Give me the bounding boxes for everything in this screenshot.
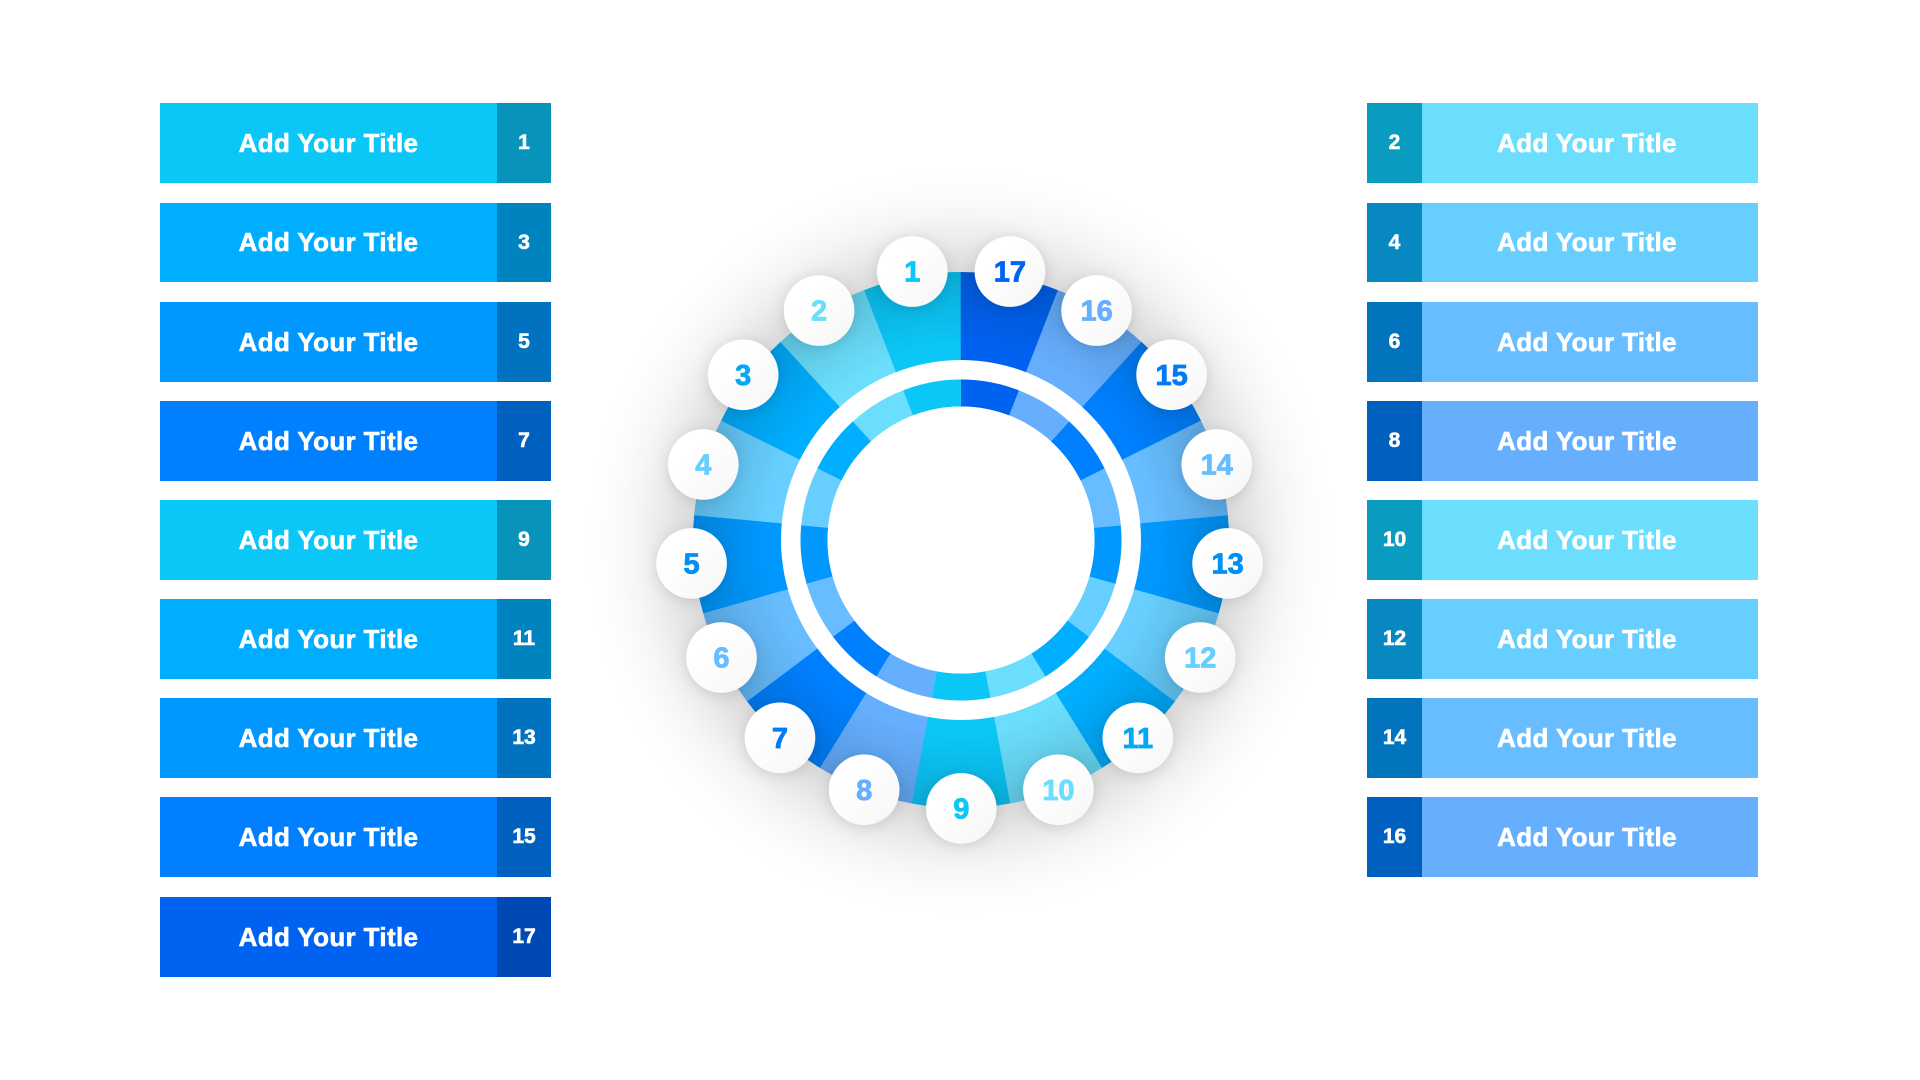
right bar 12: 12	[1383, 627, 1406, 650]
left bar 5: Add Your Title	[239, 326, 418, 356]
center circle	[828, 406, 1094, 674]
bubble 3: 3	[735, 360, 751, 392]
bubble 11	[1102, 702, 1173, 773]
left bar 13	[160, 698, 551, 778]
right bar 6	[1367, 302, 1758, 382]
bubble 11: 11	[1122, 723, 1153, 755]
bubble 16	[1061, 275, 1132, 346]
left bar 3	[160, 203, 551, 282]
bubble 10	[1023, 754, 1094, 825]
left bar 11: 11	[513, 627, 535, 650]
left bar 7: 7	[518, 429, 530, 452]
left bar 5	[160, 302, 551, 382]
bubble 17: 17	[994, 256, 1026, 288]
left bar 3: 3	[518, 230, 530, 254]
left bar 17: 17	[512, 925, 536, 948]
bubble 2: 2	[811, 296, 827, 328]
left bar 9	[160, 500, 551, 580]
right bar 16: 16	[1383, 825, 1406, 848]
right bar 4	[1367, 203, 1758, 282]
left bar 15: Add Your Title	[239, 822, 418, 852]
left bar 15	[160, 797, 551, 877]
left bar 17	[160, 897, 551, 977]
bubble 12: 12	[1184, 642, 1216, 674]
right bar 16: Add Your Title	[1497, 822, 1677, 852]
bubble 6	[686, 622, 757, 693]
left bar 11	[160, 599, 551, 679]
right bar 6: Add Your Title	[1497, 326, 1677, 356]
right bar 12: Add Your Title	[1497, 624, 1677, 654]
left bar 1	[160, 103, 551, 183]
right bar 16	[1367, 797, 1758, 877]
right bar 14: 14	[1383, 726, 1406, 749]
left bar 9: 9	[518, 528, 530, 551]
bubble 7	[745, 702, 815, 773]
bubble 13	[1192, 528, 1263, 599]
bubble 8	[829, 754, 900, 825]
bubble 16: 16	[1080, 296, 1113, 328]
bubble 4	[668, 429, 739, 500]
bubble 5	[656, 528, 727, 599]
bubble 7: 7	[772, 723, 788, 755]
right bar 4: Add Your Title	[1497, 227, 1677, 257]
bubble 1	[877, 236, 948, 307]
left bar 5: 5	[518, 330, 530, 353]
bubble 10: 10	[1042, 775, 1075, 807]
left bar 9: Add Your Title	[239, 524, 418, 554]
right bar 8: 8	[1389, 429, 1400, 452]
right bar 2: 2	[1389, 131, 1400, 154]
right bar 14	[1367, 698, 1758, 778]
bubble 14: 14	[1201, 450, 1233, 482]
right bar 8	[1367, 401, 1758, 481]
right bar 14: Add Your Title	[1497, 722, 1677, 752]
right bar 10	[1367, 500, 1758, 580]
left bar 7	[160, 401, 551, 481]
right bar 10: Add Your Title	[1497, 524, 1677, 554]
bubble 2	[784, 275, 854, 346]
left bar 15: 15	[512, 825, 536, 848]
right bar 6: 6	[1389, 330, 1400, 353]
bubble 1: 1	[904, 256, 920, 288]
bubble 3	[708, 340, 778, 410]
left bar 3: Add Your Title	[239, 227, 418, 257]
wheel shadow	[676, 257, 1246, 827]
bubble 5: 5	[684, 548, 700, 580]
left bar 11: Add Your Title	[239, 624, 418, 654]
right bar 10: 10	[1383, 528, 1406, 551]
outer edge shading	[693, 272, 1229, 808]
bubble 14	[1181, 429, 1252, 500]
bubble 4: 4	[695, 450, 711, 482]
left bar 1: Add Your Title	[239, 128, 418, 158]
bubble 9: 9	[953, 794, 969, 826]
bubble 13: 13	[1211, 548, 1244, 580]
bubble 17	[975, 236, 1045, 307]
right bar 12	[1367, 599, 1758, 679]
bubble 8: 8	[856, 775, 872, 807]
left bar 1: 1	[518, 131, 530, 154]
left bar 13: 13	[512, 726, 536, 749]
bubble 15: 15	[1155, 360, 1188, 392]
outer ring segments	[648, 227, 1274, 853]
right bar 4: 4	[1389, 230, 1400, 254]
right bar 2: Add Your Title	[1497, 128, 1677, 158]
bubble 6: 6	[713, 642, 730, 674]
white ring	[781, 360, 1141, 720]
bubble 12	[1165, 622, 1235, 693]
left bar 13: Add Your Title	[239, 722, 418, 752]
left bar 17: Add Your Title	[239, 922, 418, 952]
bubble 9	[926, 773, 997, 844]
right bar 2	[1367, 103, 1758, 183]
bubble 15	[1136, 340, 1207, 410]
right bar 8: Add Your Title	[1497, 426, 1677, 456]
inner ring segments	[753, 332, 1169, 748]
left bar 7: Add Your Title	[239, 426, 418, 456]
